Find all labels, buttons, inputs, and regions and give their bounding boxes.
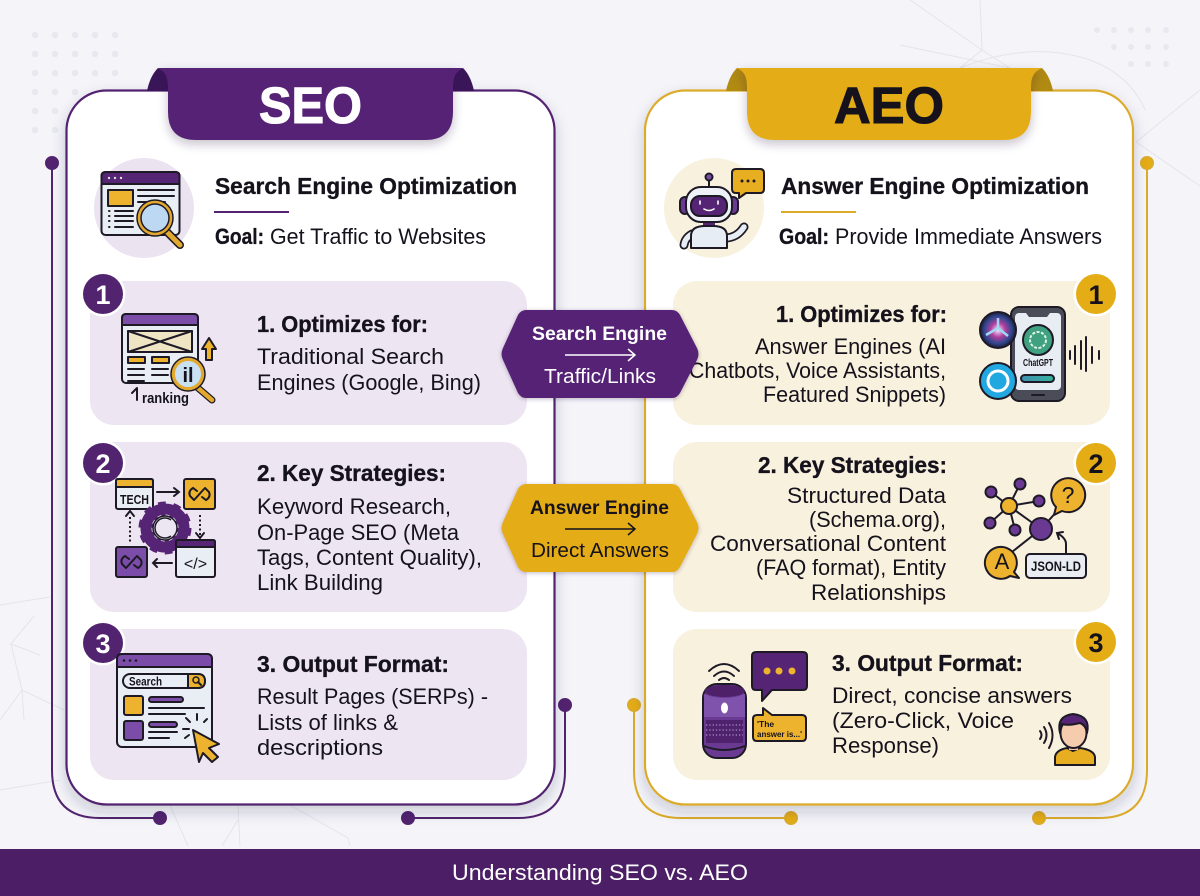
- text: Keyword Research,: [257, 494, 451, 519]
- icon: smart speaker: 'The: [757, 719, 774, 729]
- text: 2. Key Strategies:: [257, 460, 446, 486]
- AEO title and goal: [779, 173, 1102, 249]
- icon: strategy cycle: [116, 479, 215, 577]
- text: Response): [832, 733, 939, 758]
- badge 2: 2: [1088, 449, 1104, 479]
- badge 1: 1: [95, 280, 111, 310]
- text: 2. Key Strategies:: [758, 452, 947, 478]
- badge 1: [1074, 272, 1118, 316]
- icon: phone with assistants: [980, 307, 1099, 401]
- text: Conversational Content: [710, 531, 946, 556]
- badge 2: [80, 440, 126, 486]
- icon: robot assistant: [664, 158, 764, 258]
- icon: strategy cycle: TECH: [120, 493, 149, 507]
- SEO panel 3: [80, 620, 527, 780]
- text: (FAQ format), Entity: [756, 555, 946, 580]
- SEO title and goal: Search Engine Optimization: [215, 173, 517, 199]
- SEO panel 1: [80, 272, 527, 425]
- AEO title and goal: Provide Immediate Answers: [835, 224, 1102, 249]
- text: (Zero-Click, Voice: [832, 708, 1014, 733]
- icon: listener: [1040, 714, 1095, 765]
- hexagon: answer engine to direct answers: [502, 484, 698, 572]
- hexagon: search engine to traffic: Traffic/Links: [544, 366, 656, 388]
- badge 2: [1074, 440, 1118, 486]
- icon: phone with assistants: ChatGPT: [1023, 358, 1053, 369]
- icon: entity graph: ?: [1062, 482, 1074, 508]
- icon: entity graph: A: [995, 549, 1010, 574]
- badge 3: [1074, 620, 1118, 664]
- text: Tags, Content Quality),: [257, 545, 482, 570]
- SEO title and goal: [214, 173, 517, 249]
- panel: SEO card: [66, 68, 554, 804]
- AEO title and goal: Goal:: [779, 224, 829, 249]
- icon: browser with magnifier: [94, 158, 194, 258]
- SEO panel 2: [80, 440, 527, 612]
- SEO ribbon heading: [147, 68, 474, 140]
- text: [257, 651, 488, 760]
- icon: ranking page: ranking: [142, 390, 189, 407]
- icon: ranking page: il: [182, 365, 194, 387]
- connector lines: SEO: [46, 157, 571, 824]
- text: Lists of links &: [257, 710, 398, 735]
- text: (Schema.org),: [809, 507, 946, 532]
- SEO title and goal: Goal:: [215, 224, 264, 249]
- icon: strategy cycle: </>: [184, 556, 207, 573]
- text: Chatbots, Voice Assistants,: [689, 358, 946, 383]
- badge 3: 3: [1088, 628, 1104, 658]
- text: [832, 650, 1072, 758]
- icon: entity graph: [984, 478, 1086, 579]
- AEO panel 2: [673, 440, 1118, 612]
- AEO panel 3: [673, 620, 1118, 780]
- text: Structured Data: [787, 483, 947, 508]
- text: [689, 301, 947, 407]
- AEO ribbon heading: AEO: [834, 77, 944, 134]
- text: Answer Engines (AI: [755, 334, 946, 359]
- text: 3. Output Format:: [832, 650, 1023, 676]
- text: 1. Optimizes for:: [776, 301, 947, 327]
- text: [257, 311, 481, 395]
- panel: AEO card: [645, 68, 1133, 804]
- text: [710, 452, 947, 605]
- AEO ribbon heading: [726, 68, 1053, 140]
- hexagon: answer engine to direct answers: Direct Answers: [531, 540, 669, 562]
- text: Direct, concise answers: [832, 683, 1072, 708]
- badge 1: [80, 272, 126, 316]
- text: Result Pages (SERPs) -: [257, 684, 488, 709]
- text: Relationships: [811, 580, 946, 605]
- text: Engines (Google, Bing): [257, 370, 481, 395]
- icon: ranking page: [122, 314, 216, 407]
- icon: smart speaker: answer is...': [757, 729, 802, 739]
- hexagon: answer engine to direct answers: Answer Engine: [530, 497, 669, 519]
- footer bar: [0, 849, 1200, 896]
- AEO panel 1: [673, 272, 1118, 425]
- SEO ribbon heading: SEO: [259, 77, 362, 134]
- text: [257, 460, 482, 595]
- text: On-Page SEO (Meta: [257, 520, 460, 545]
- text: Featured Snippets): [763, 382, 946, 407]
- badge 3: 3: [95, 629, 111, 659]
- badge 1: 1: [1088, 280, 1104, 310]
- footer bar: Understanding SEO vs. AEO: [452, 860, 748, 885]
- hexagon: search engine to traffic: [502, 310, 698, 398]
- icon: search results: Search: [129, 674, 162, 688]
- badge 2: 2: [95, 449, 111, 479]
- text: 3. Output Format:: [257, 651, 449, 677]
- icon: entity graph: JSON-LD: [1031, 558, 1081, 574]
- connector lines: AEO: [628, 157, 1153, 824]
- text: descriptions: [257, 735, 383, 760]
- text: Link Building: [257, 570, 383, 595]
- icon: search results: [117, 654, 219, 762]
- hexagon: search engine to traffic: Search Engine: [532, 323, 667, 345]
- SEO title and goal: Get Traffic to Websites: [270, 224, 486, 249]
- text: 1. Optimizes for:: [257, 311, 428, 337]
- icon: smart speaker: [703, 652, 807, 758]
- AEO title and goal: Answer Engine Optimization: [781, 173, 1089, 199]
- badge 3: [80, 620, 126, 666]
- text: Traditional Search: [257, 344, 444, 369]
